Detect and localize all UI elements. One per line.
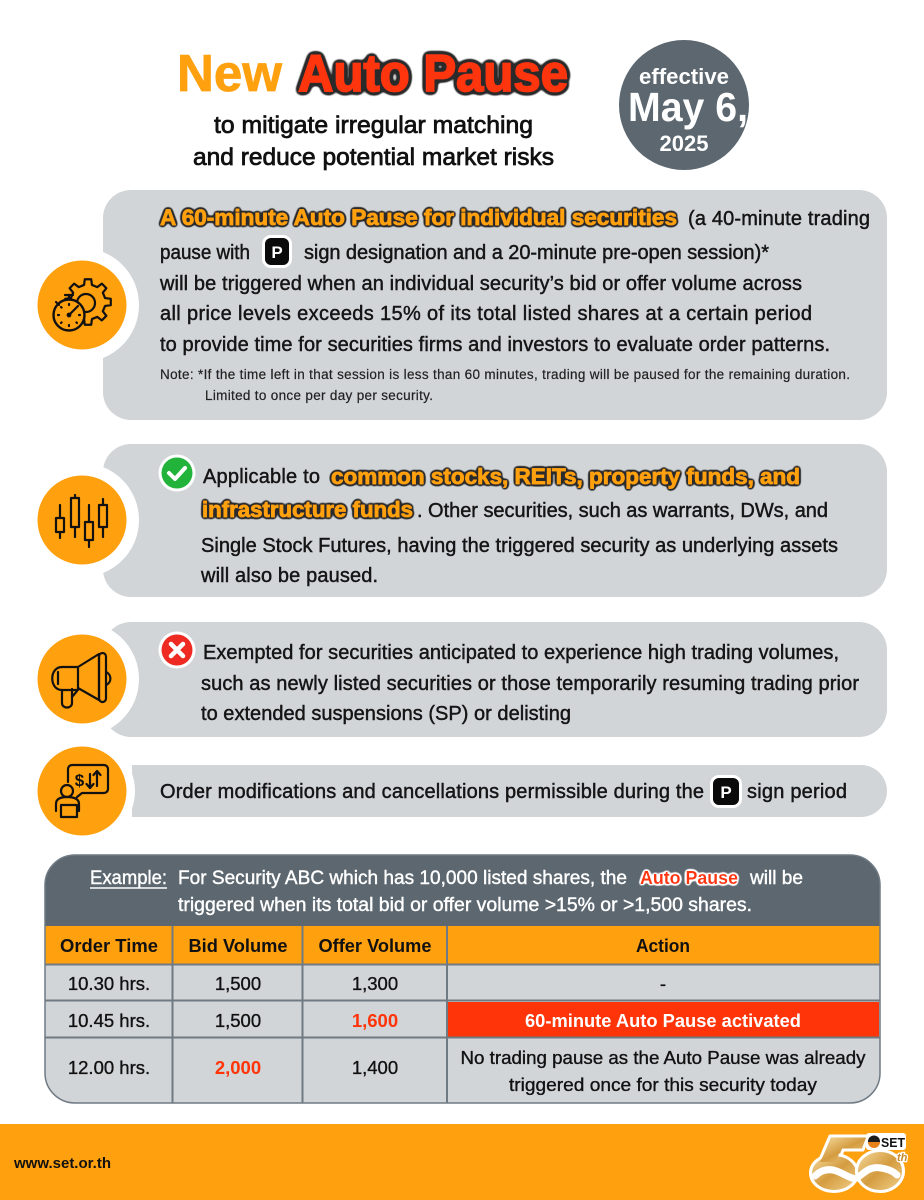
table row: 10.45: 1,600 [352, 1010, 398, 1031]
body text: will be triggered when an individual security’s bid or offer volume across [159, 273, 802, 295]
website url: www.set.or.th [13, 1155, 111, 1172]
body text: to provide time for securities firms and investors to evaluate order patterns. [160, 334, 830, 356]
table row: 10.45 [68, 1010, 801, 1031]
highlighted text and body: infrastructure funds [202, 497, 413, 522]
icon: red cross [158, 632, 196, 668]
body text: sign period [747, 781, 847, 803]
table row: 10.30 [68, 973, 666, 994]
title: Auto Pause [298, 45, 568, 103]
table row: 10.45: 60-minute Auto Pause activated [525, 1010, 801, 1031]
logo: SET 50th [810, 1133, 908, 1192]
table row: 10.45: 1,500 [215, 1010, 261, 1031]
highlighted text and body: . Other securities, such as warrants, DWs, and [417, 500, 828, 522]
table header row: Action [636, 935, 690, 956]
subtitle: and reduce potential market risks [193, 144, 554, 171]
title [177, 45, 568, 103]
footer band [0, 1124, 924, 1200]
example heading: Example: [90, 868, 167, 889]
body text: to extended suspensions (SP) or delisting [201, 703, 571, 725]
table row: 10.30: 1,300 [352, 973, 398, 994]
icon: megaphone [38, 634, 126, 724]
example heading: For Security ABC which has 10,000 listed shares, the [178, 868, 627, 889]
table header row: Bid Volume [188, 935, 288, 956]
note: Limited to once per day per security. [205, 388, 433, 403]
icon: P sign [262, 235, 292, 268]
table header row: Order Time [60, 935, 158, 956]
table row: 12.00: 2,000 [215, 1057, 261, 1078]
table row: 10.30: - [660, 973, 666, 994]
logo: SET 50th: SET [881, 1135, 905, 1150]
table header row [60, 935, 690, 956]
body text [159, 208, 870, 356]
icon: candlesticks [38, 476, 126, 564]
panel: example table [45, 855, 880, 1103]
table row: 10.30: 1,500 [215, 973, 261, 994]
example heading: Auto Pause [640, 868, 738, 888]
table row: 12.00 [68, 1047, 866, 1095]
body text: (a 40-minute trading [688, 208, 870, 230]
highlighted text and body: Applicable to [203, 466, 320, 488]
body text: sign designation and a 20-minute pre-open session)* [304, 242, 769, 264]
badge: effective date [619, 40, 749, 170]
note: Note: *If the time left in that session is less than 60 minutes, trading will be paused for the remaining duration. [160, 367, 850, 382]
example heading: triggered when its total bid or offer volume >15% or >1,500 shares. [178, 895, 752, 916]
panel: applicable securities [25, 444, 887, 597]
subtitle: to mitigate irregular matching [214, 112, 533, 139]
table header row: Offer Volume [318, 935, 432, 956]
icon: green check [158, 454, 196, 492]
body text: pause with [160, 242, 250, 264]
example heading: will be [749, 868, 803, 889]
table row: 12.00: triggered once for this security today [509, 1074, 818, 1095]
badge: effective date: 2025 [660, 131, 708, 156]
icon: stopwatch and gear [38, 260, 126, 350]
highlighted text and body: will also be paused. [200, 565, 378, 587]
table row: 10.45: 10.45 hrs. [68, 1010, 150, 1031]
highlighted text and body: common stocks, REITs, property funds, and [331, 464, 800, 489]
body text: Order modifications and cancellations permissible during the [160, 781, 704, 803]
panel: 60-minute auto pause [25, 190, 887, 420]
icon: trader with speech bubble [38, 746, 126, 836]
icon: trader with speech bubble: $ [75, 771, 85, 790]
subtitle [193, 112, 554, 171]
note [160, 367, 850, 403]
highlighted text and body: Single Stock Futures, having the triggered security as underlying assets [201, 535, 838, 557]
badge: effective date: effective [639, 64, 729, 89]
headline: A 60-minute Auto Pause for individual securities [160, 205, 677, 230]
panel: order modifications [29, 738, 887, 844]
title: New [177, 45, 283, 103]
icon: P sign: P [271, 243, 283, 262]
logo: SET 50th: th [897, 1152, 908, 1164]
icon: P sign [710, 775, 742, 808]
body text: such as newly listed securities or those temporarily resuming trading prior [201, 673, 859, 695]
icon: P sign: P [720, 783, 732, 802]
body text [201, 642, 859, 725]
highlighted text and body [200, 464, 838, 587]
badge: effective date: May 6, [628, 84, 748, 130]
panel: exempted securities [25, 622, 887, 737]
table row: 10.30: 10.30 hrs. [68, 973, 150, 994]
table row: 12.00: 12.00 hrs. [68, 1057, 150, 1078]
table row: 12.00: 1,400 [352, 1057, 398, 1078]
body text: all price levels exceeds 15% of its total listed shares at a certain period [160, 303, 812, 325]
example heading [90, 868, 803, 916]
table row: 12.00: No trading pause as the Auto Pause was already [460, 1047, 866, 1068]
body text: Exempted for securities anticipated to experience high trading volumes, [203, 642, 839, 664]
